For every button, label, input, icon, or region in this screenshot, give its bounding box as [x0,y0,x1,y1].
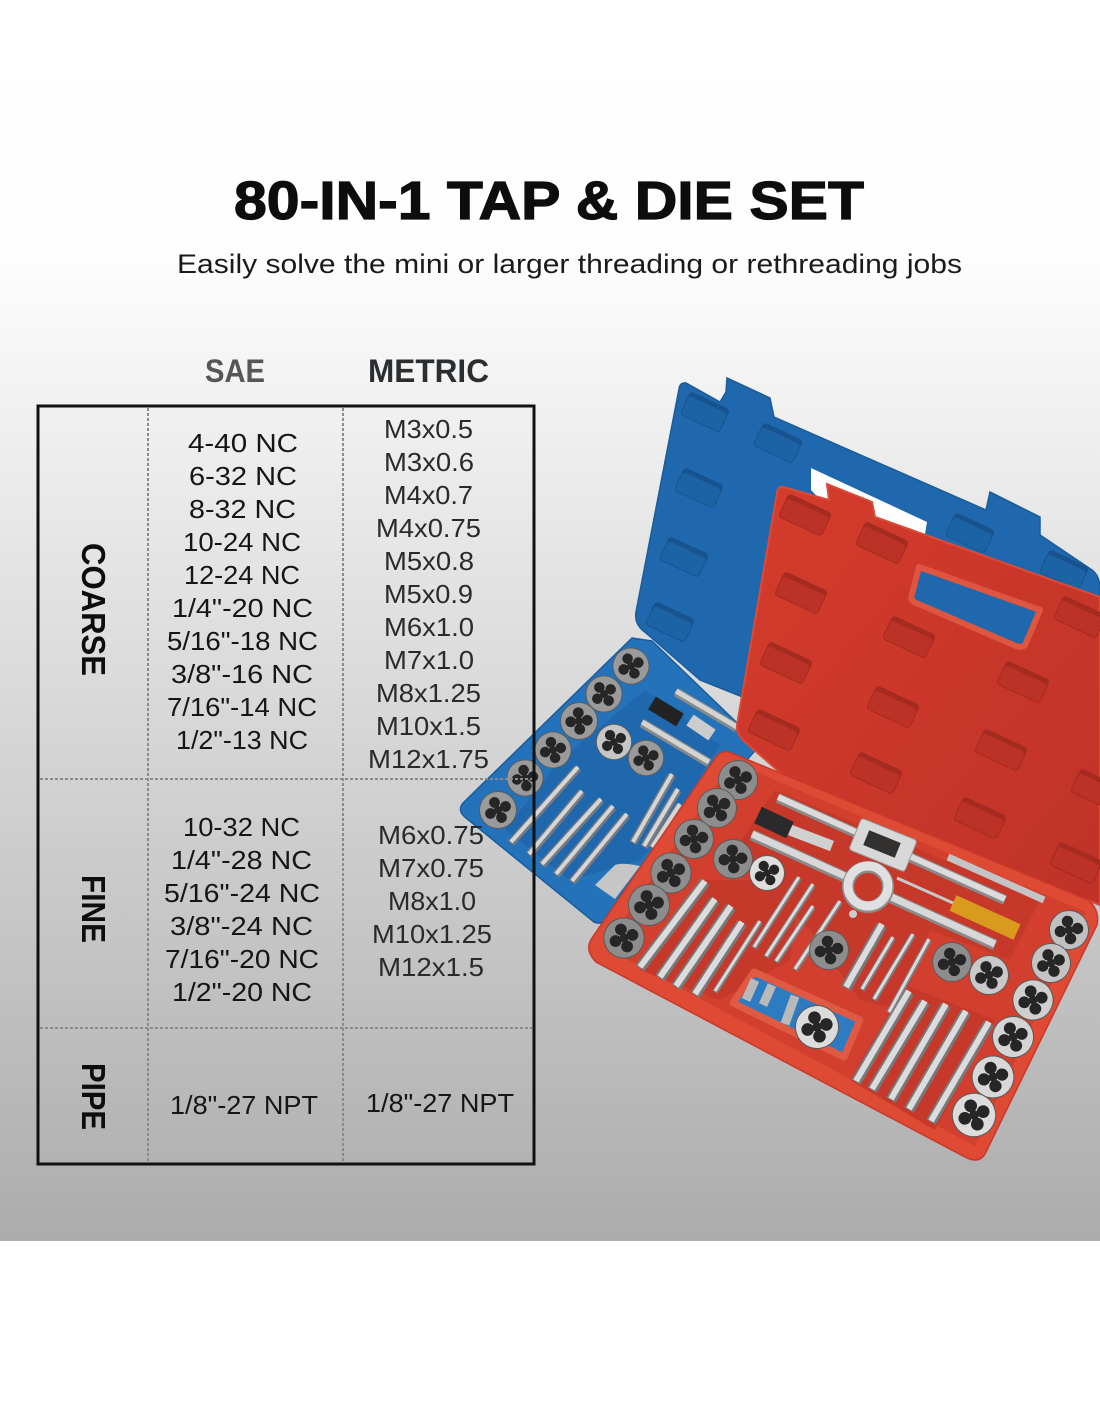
metric fine sizes: M12x1.5 [378,952,484,982]
SAE fine sizes: 7/16"-20 NC [165,944,319,974]
die stock [752,834,995,945]
SAE coarse sizes: 10-24 NC [183,527,301,557]
SAE fine sizes: 1/2"-20 NC [172,977,312,1007]
SAE fine sizes: 10-32 NC [183,812,300,842]
SAE coarse sizes: 7/16"-14 NC [167,692,317,722]
lid handle window [911,567,1040,647]
blue tray wells [505,690,720,880]
blue tray taps [511,767,680,882]
metric fine sizes: M6x0.75 [378,820,484,850]
blue tray handle cutout [595,864,640,899]
SAE coarse sizes: 1/4"-20 NC [172,593,313,623]
table dividers [40,408,532,1163]
metric coarse sizes: M3x0.5 [384,414,473,444]
metric fine sizes: M7x0.75 [378,853,484,883]
metric coarse sizes: M4x0.75 [376,513,481,543]
cutout contents [746,980,795,1024]
metric coarse sizes: M12x1.75 [368,744,489,774]
blue tray dies [474,643,669,834]
metric coarse sizes: M5x0.9 [384,579,473,609]
SAE coarse sizes: 12-24 NC [184,560,300,590]
SAE fine sizes: 3/8"-24 NC [170,911,313,941]
blue case tray [460,638,760,923]
SAE fine sizes: 5/16"-24 NC [164,878,320,908]
metric coarse sizes: M4x0.7 [384,480,473,510]
row label: FINE: FINE [75,875,112,943]
SAE coarse sizes: 1/2"-13 NC [176,725,308,755]
chuck [758,815,832,846]
metric fine sizes [372,820,492,982]
metric fine sizes: M8x1.0 [388,886,476,916]
column heading: METRIC: METRIC [368,353,489,389]
tap wrench [778,797,1005,900]
row label: PIPE: PIPE [75,1063,112,1130]
red tray taps [640,877,989,1122]
table outer border [38,406,534,1164]
SAE coarse sizes: 6-32 NC [189,461,297,491]
SAE coarse sizes: 8-32 NC [189,494,296,524]
blue lid recesses [645,391,1089,643]
metric coarse sizes: M5x0.8 [384,546,474,576]
SAE coarse sizes: 4-40 NC [188,428,298,458]
title: 80-IN-1 TAP & DIE SET [234,171,864,231]
SAE coarse sizes: 3/8"-16 NC [171,659,313,689]
tray handle cutout [733,972,860,1057]
metric coarse sizes: M7x1.0 [384,645,474,675]
tray raised rim [604,762,1086,1146]
red case lid [737,484,1100,905]
metric coarse sizes [368,414,489,774]
metric pipe size: 1/8"-27 NPT [366,1088,514,1118]
pin [948,857,1044,900]
thread size table [38,406,534,1164]
tool wells [735,790,1040,1010]
metric coarse sizes: M8x1.25 [376,678,481,708]
metric coarse sizes: M6x1.0 [384,612,474,642]
row label: COARSE: COARSE [75,543,112,676]
subtitle: Easily solve the mini or larger threading or rethreading jobs [177,249,962,279]
red lid recesses [747,493,1100,885]
SAE coarse sizes: 5/16"-18 NC [167,626,318,656]
blue tray tools [642,691,737,763]
blue case lid [636,378,1100,720]
column heading: SAE: SAE [205,353,265,389]
SAE fine sizes: 1/4"-28 NC [171,845,312,875]
metric coarse sizes: M3x0.6 [384,447,474,477]
metric fine sizes: M10x1.25 [372,919,492,949]
product photo: tap and die cases [460,378,1100,1160]
SAE pipe size: 1/8"-27 NPT [170,1090,318,1120]
lid window [811,468,927,534]
metric coarse sizes: M10x1.5 [376,711,481,741]
red case tray [589,752,1098,1160]
SAE fine sizes [164,812,320,1007]
screwdriver [897,878,1017,932]
red tray dies [597,754,1096,1144]
SAE coarse sizes [167,428,318,755]
